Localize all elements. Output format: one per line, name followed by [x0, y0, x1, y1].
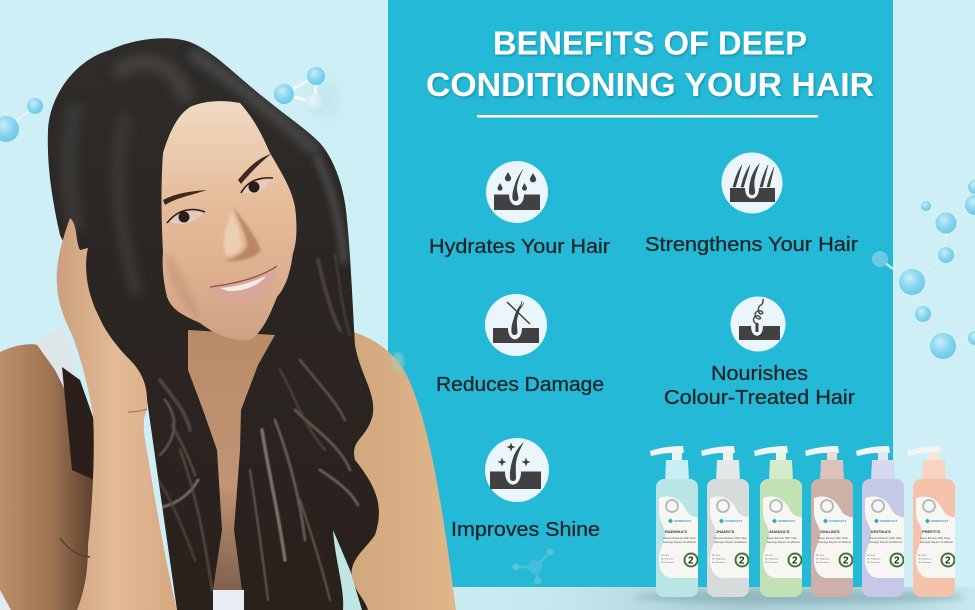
eye right	[241, 178, 273, 193]
title underline	[477, 115, 818, 118]
floor strip	[388, 587, 975, 610]
bottle: Shalini's: SKINKRAFT	[829, 519, 846, 523]
white top centre	[213, 590, 244, 610]
eye left	[167, 210, 205, 224]
wrist crease	[128, 409, 147, 412]
bottle: Radhika's: RADHIKA'S	[665, 529, 687, 534]
benefit: nourishes	[664, 296, 855, 409]
bottle: Ananya's: Super Bounce With Total	[767, 536, 797, 540]
title: BENEFITS OF DEEP	[493, 24, 807, 62]
bottle: Kritika's: Intense Moisture With Total	[869, 536, 902, 540]
bottle: Shalini's: NO Parabens	[816, 561, 830, 564]
bottle: Ananya's: ANANYA'S	[769, 529, 790, 534]
bottle: Preeti's: NO Parabens	[918, 561, 932, 564]
arm and hand in hair	[57, 218, 177, 610]
bottle: Radhika's: NO SLS	[661, 555, 670, 557]
face	[162, 101, 296, 340]
molecule: right edge	[872, 180, 975, 359]
bottle: Jhanvi's: 2	[739, 556, 745, 566]
bottle: Kritika's: Damage Repair Conditioner	[869, 540, 902, 544]
floor shadow	[635, 590, 965, 604]
bottle: Kritika's: 2	[894, 556, 900, 566]
bottle: Ananya's: 2	[792, 556, 798, 566]
molecule: top near hair	[274, 67, 339, 118]
white top lower left	[0, 590, 11, 610]
label: Nourishes	[711, 363, 808, 385]
bottle: Preeti's: NO SLS	[918, 555, 927, 557]
neck and chest	[188, 330, 275, 590]
bottle: Jhanvi's: JHANVI'S	[716, 529, 735, 534]
label: Improves Shine	[451, 519, 600, 541]
label: Hydrates Your Hair	[429, 236, 610, 258]
cheek shading	[165, 255, 200, 320]
bottle: Shalini's: Damage Repair Conditioner	[818, 540, 851, 544]
bottle: Radhika's: NO Silicones	[661, 558, 675, 560]
hair behind arm	[62, 367, 94, 480]
icon: sparkles and hair	[485, 438, 549, 502]
benefit: improves shine	[451, 438, 600, 541]
eyebrow left	[163, 190, 207, 205]
right shoulder and arm	[340, 330, 456, 610]
bottle: Preeti's: SKINKRAFT	[931, 519, 948, 523]
left shoulder and torso	[0, 344, 100, 610]
icon: curly hair	[730, 296, 786, 352]
eyebrow right	[238, 154, 271, 184]
bottle: Shalini's	[805, 446, 853, 597]
icon: strong hair strands	[722, 152, 782, 214]
bottle: Radhika's: 2	[688, 556, 694, 566]
bottle: Preeti's: Damage Repair Conditioner	[920, 540, 953, 544]
shoulder tint patch	[392, 352, 404, 372]
bottle: Shalini's: NO SLS	[816, 555, 825, 557]
bottle: Jhanvi's: Intense Moisture With Total	[714, 536, 747, 540]
bottle: Ananya's: NO Sulphates	[765, 558, 780, 560]
icon: damaged hair crossed	[485, 294, 547, 356]
bottle: Jhanvi's: NO SLS	[712, 555, 721, 557]
bottle: Radhika's: Damage Repair Conditioner	[663, 540, 696, 544]
nose shadow	[224, 207, 261, 261]
bottle: Jhanvi's: SKINKRAFT	[725, 519, 742, 523]
bottle: Shalini's: NO Sulphates	[816, 558, 831, 560]
bottle: Kritika's: NO Parabens	[867, 561, 881, 564]
bottle: Jhanvi's: Damage Repair Conditioner	[714, 540, 747, 544]
title: CONDITIONING YOUR HAIR	[426, 66, 874, 103]
molecule: faint bottom of panel	[512, 548, 554, 584]
bottle: Preeti's: 2	[945, 556, 951, 566]
bottle: Shalini's: 2	[843, 556, 849, 566]
bottle: Kritika's: NO SLS	[867, 555, 876, 557]
bottle: Radhika's	[650, 446, 698, 597]
label: Colour-Treated Hair	[664, 387, 855, 409]
white top strap	[35, 327, 85, 425]
bottle: Radhika's: Intense Moisture With Total	[663, 536, 696, 540]
bottle: Ananya's: NO Parabens	[765, 561, 779, 564]
product bottles	[635, 446, 965, 604]
benefit: hydrates	[429, 161, 610, 258]
bottle: Jhanvi's: NO Parabens	[712, 561, 726, 564]
hair highlights	[69, 55, 358, 600]
bottle: Radhika's: SKINKRAFT	[674, 519, 691, 523]
label	[664, 363, 855, 409]
bottle: Preeti's: PREETI'S	[922, 529, 940, 534]
bottle: Ananya's	[754, 446, 802, 597]
benefit: reduces damage	[436, 294, 604, 396]
bottle: Shalini's: SHALINI'S	[820, 529, 840, 534]
bottle: Preeti's	[907, 446, 955, 597]
bottle: Ananya's: NO SLS	[765, 555, 774, 557]
hair mass	[48, 38, 379, 610]
title	[426, 24, 874, 103]
label: Reduces Damage	[436, 374, 604, 396]
bottle: Kritika's: SKINKRAFT	[880, 519, 897, 523]
bottle: Kritika's: KRITIKA'S	[871, 529, 891, 534]
benefit: strengthens	[645, 152, 858, 256]
bottle: Jhanvi's: NO Sulphates	[712, 558, 727, 560]
label: Strengthens Your Hair	[645, 234, 858, 256]
bottle: Ananya's: SKINKRAFT	[778, 519, 795, 523]
bottle: Radhika's: NO Parabens	[661, 561, 675, 564]
smile	[210, 266, 277, 303]
bottle: Kritika's	[856, 446, 904, 597]
bottle: Jhanvi's	[701, 446, 749, 597]
bottle: Shalini's: Super Bounce With Total	[818, 536, 848, 540]
bottle: Preeti's: NO Sulphates	[918, 558, 933, 560]
bottle: Preeti's: Super Bounce With Total	[920, 536, 950, 540]
icon: water drops on hair follicle	[486, 161, 548, 223]
background seen through hair	[333, 530, 362, 610]
elbow crease	[60, 538, 90, 557]
bottle: Kritika's: NO Sulphates	[867, 558, 882, 560]
panel: teal benefits panel	[388, 0, 893, 587]
bottle: Ananya's: Damage Repair Conditioner	[767, 540, 800, 544]
nose highlight	[224, 212, 242, 256]
woman portrait	[0, 38, 456, 610]
molecule: left edge	[0, 98, 43, 142]
